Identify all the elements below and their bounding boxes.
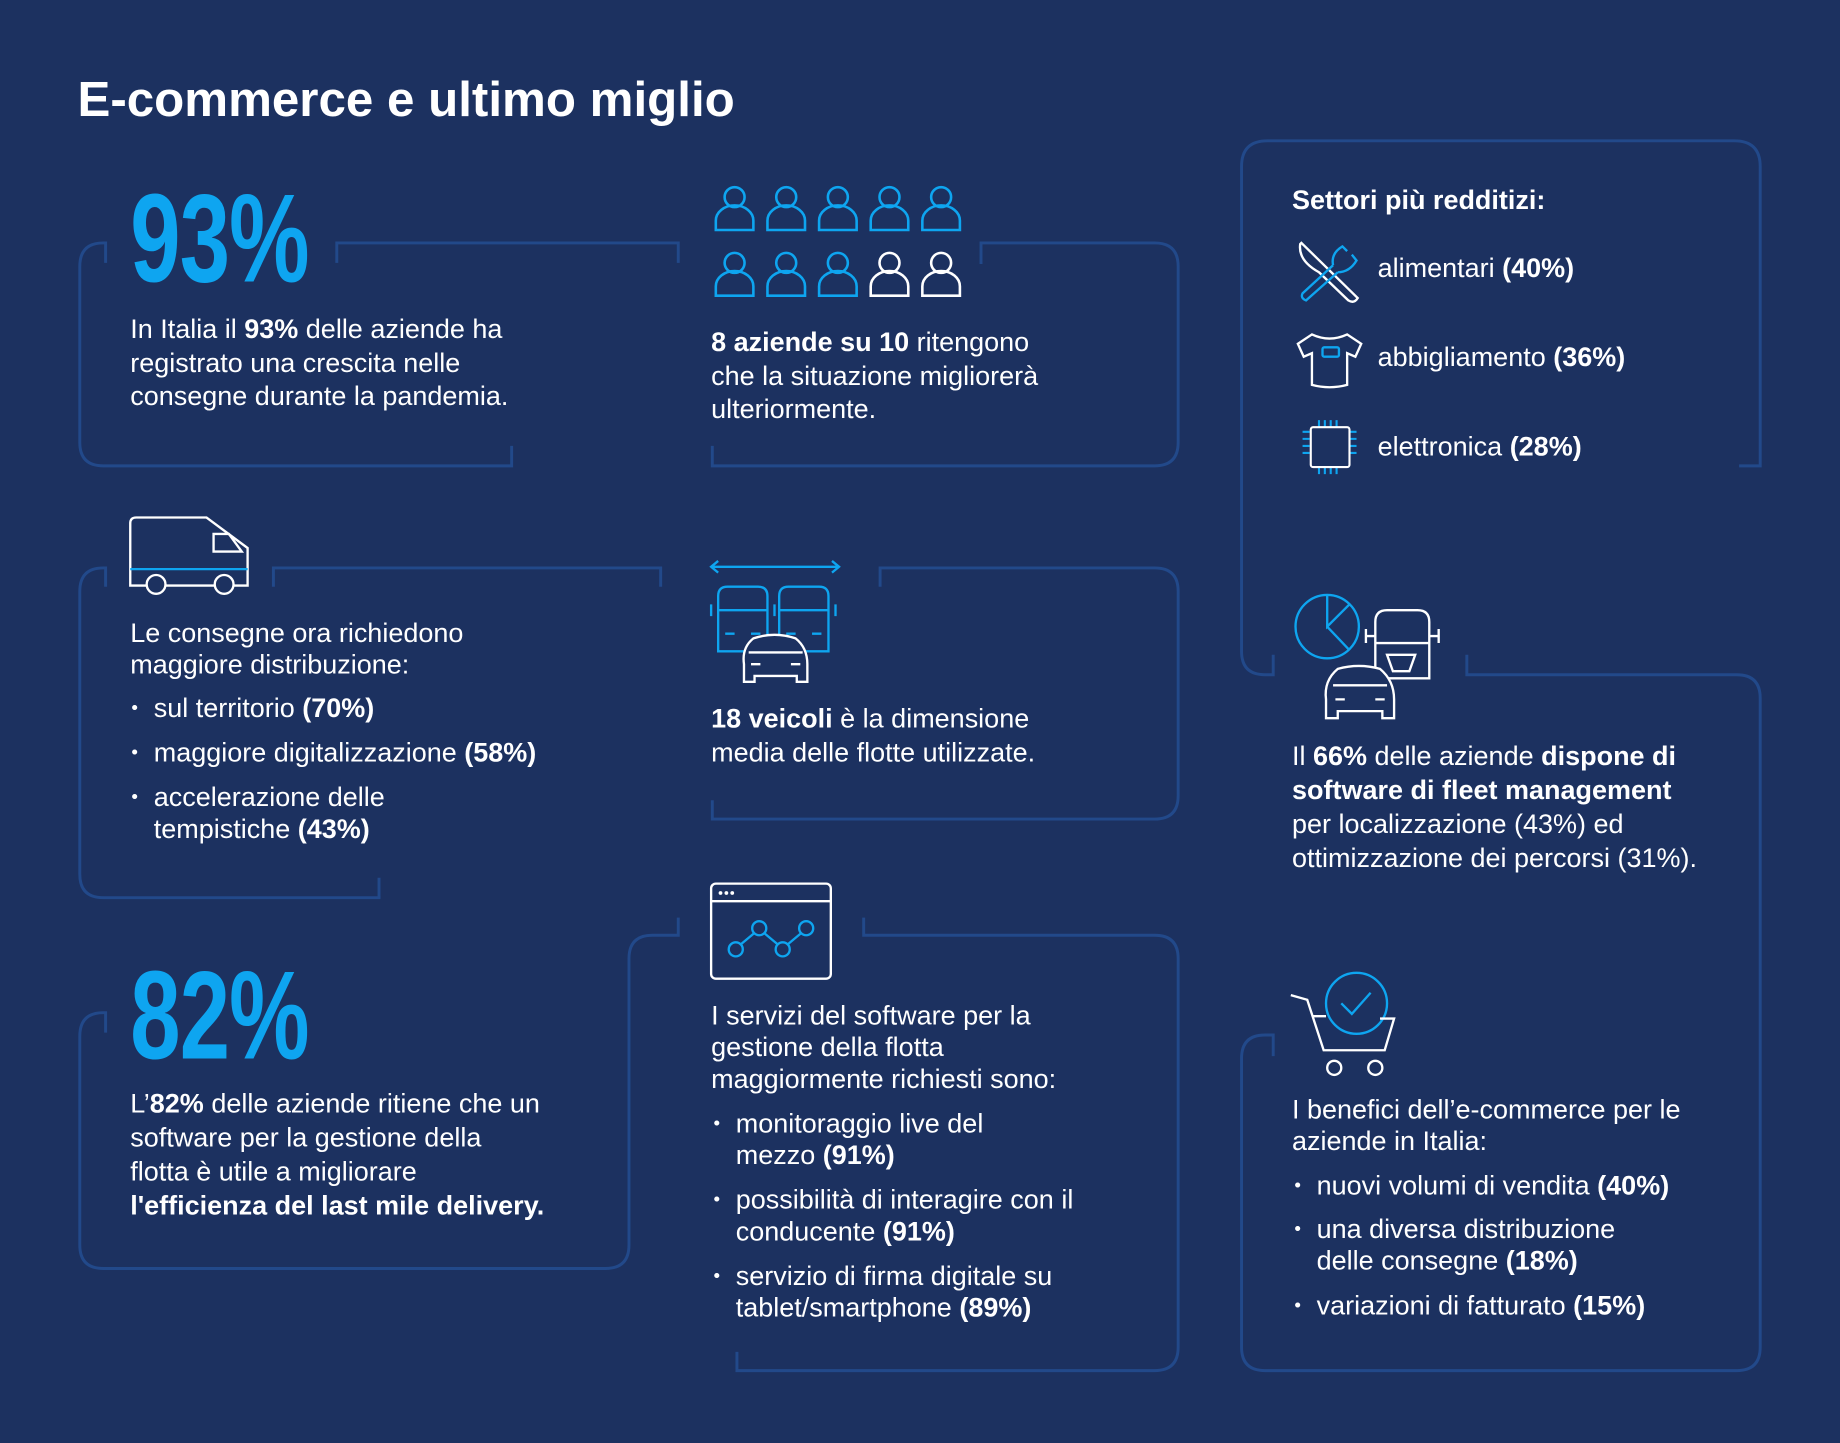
text 82%: l'efficienza del last mile delivery. — [130, 1190, 544, 1220]
text 93% — [130, 313, 508, 411]
text consegne: maggiore distribuzione: — [130, 649, 409, 679]
text servizi: maggiormente richiesti sono: — [711, 1063, 1056, 1094]
text 82%: L’82% delle aziende ritiene che un — [130, 1088, 540, 1118]
text 82%: software per la gestione della — [130, 1122, 481, 1152]
text 8 su 10 — [711, 326, 1038, 424]
panel: 93% — [130, 168, 508, 411]
text benefici: I benefici dell’e-commerce per le — [1292, 1094, 1681, 1124]
list servizi: conducente (91%) — [736, 1216, 955, 1246]
text servizi: I servizi del software per la — [711, 1000, 1031, 1030]
text servizi: gestione della flotta — [711, 1031, 944, 1062]
icon: van — [129, 516, 249, 595]
list servizi: mezzo (91%) — [736, 1139, 895, 1170]
icon: fleet vehicles with arrow — [709, 560, 841, 683]
list consegne: accelerazione delle — [154, 782, 385, 812]
text consegne: Le consegne ora richiedono — [130, 617, 463, 648]
text 8 su 10: 8 aziende su 10 ritengono — [711, 326, 1029, 357]
text 18 veicoli: media delle flotte utilizzate. — [711, 737, 1035, 767]
icon: chip — [1302, 420, 1357, 474]
list servizi — [714, 1108, 1073, 1323]
text 8 su 10: ulteriormente. — [711, 393, 876, 424]
list benefici: una diversa distribuzione — [1317, 1213, 1615, 1244]
panel: settori — [1292, 184, 1625, 474]
text servizi — [711, 1000, 1056, 1094]
list servizi: possibilità di interagire con il — [736, 1184, 1073, 1215]
text benefici — [1292, 1094, 1681, 1156]
text 93%: In Italia il 93% delle aziende ha — [130, 313, 502, 344]
text 93%: consegne durante la pandemia. — [130, 380, 508, 411]
panel: consegne — [129, 516, 536, 844]
panel: fleet software 66% — [1292, 594, 1697, 873]
text 66%: software di fleet management — [1292, 774, 1671, 805]
icon: pie chart truck car — [1294, 594, 1440, 720]
panel: benefici — [1290, 972, 1681, 1320]
text 66%: per localizzazione (43%) ed — [1292, 809, 1624, 839]
text abbigliamento: abbigliamento (36%) — [1378, 341, 1625, 372]
text 66%: ottimizzazione dei percorsi (31%). — [1292, 843, 1697, 873]
big stat 82%: 82% — [130, 945, 309, 1085]
list benefici: nuovi volumi di vendita (40%) — [1317, 1170, 1669, 1200]
list servizi: tablet/smartphone (89%) — [736, 1292, 1031, 1323]
panel: 8 su 10 — [711, 186, 1038, 424]
text consegne — [130, 617, 463, 679]
text benefici: aziende in Italia: — [1292, 1125, 1487, 1156]
text 66% — [1292, 740, 1697, 873]
text 18 veicoli — [711, 703, 1035, 767]
icon: browser chart — [710, 882, 832, 980]
big stat 93%: 93% — [130, 168, 309, 309]
text 82%: flotta è utile a migliorare — [130, 1156, 417, 1186]
heading settori: Settori più redditizi: — [1292, 184, 1545, 215]
icon: cutlery — [1298, 241, 1360, 303]
list consegne: tempistiche (43%) — [154, 813, 370, 844]
list consegne: sul territorio (70%) — [154, 692, 374, 723]
panel: servizi software — [710, 882, 1073, 1323]
text alimentari: alimentari (40%) — [1378, 252, 1574, 283]
text 8 su 10: che la situazione migliorerà — [711, 360, 1038, 390]
list benefici: delle consegne (18%) — [1317, 1245, 1578, 1276]
list consegne — [132, 692, 536, 844]
list servizi: monitoraggio live del — [736, 1108, 983, 1138]
list consegne: maggiore digitalizzazione (58%) — [154, 737, 536, 767]
icon: people grid — [714, 186, 962, 297]
title: E-commerce e ultimo miglio — [77, 72, 735, 127]
panel: 82% — [130, 945, 544, 1220]
list benefici: variazioni di fatturato (15%) — [1317, 1290, 1645, 1320]
text 66%: Il 66% delle aziende dispone di — [1292, 740, 1676, 771]
panel: 18 veicoli — [709, 560, 1035, 767]
icon: t-shirt — [1296, 333, 1363, 388]
text 93%: registrato una crescita nelle — [130, 347, 460, 377]
text 82% — [130, 1088, 544, 1220]
list servizi: servizio di firma digitale su — [736, 1260, 1052, 1291]
icon: cart with check — [1290, 972, 1396, 1076]
list benefici — [1295, 1170, 1669, 1320]
text elettronica: elettronica (28%) — [1378, 431, 1582, 461]
text 18 veicoli: 18 veicoli è la dimensione — [711, 703, 1029, 733]
